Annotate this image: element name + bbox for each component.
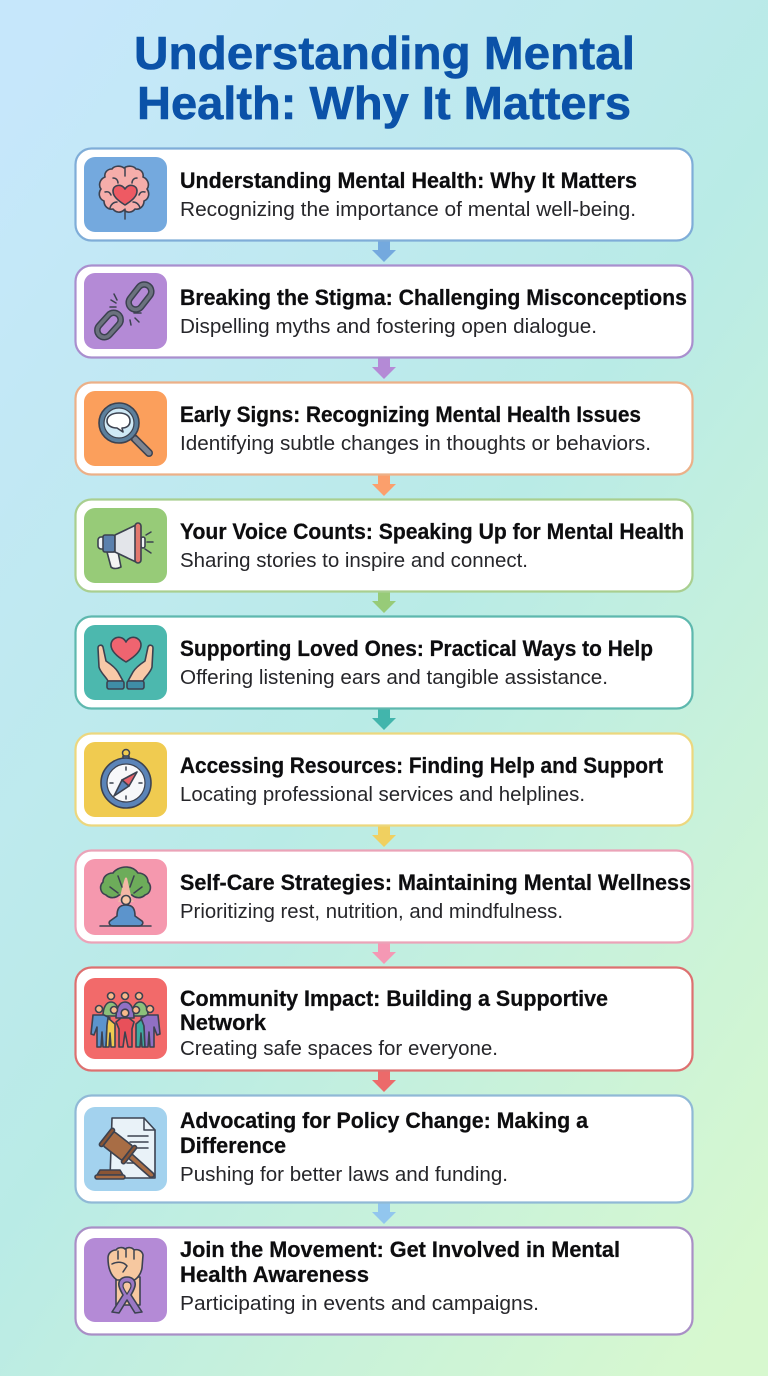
step 6 text: Locating professional services and helplines. xyxy=(180,784,585,806)
step 9 text: Pushing for better laws and funding. xyxy=(180,1164,508,1186)
step 1 text: Recognizing the importance of mental well-being. xyxy=(180,199,636,221)
icon: megaphone xyxy=(84,508,167,583)
panel: step 4 xyxy=(76,500,692,592)
step 3 text xyxy=(180,402,651,455)
step 5 text: Offering listening ears and tangible assistance. xyxy=(180,667,608,689)
step 2 text: Breaking the Stigma: Challenging Misconceptions xyxy=(180,285,687,310)
step 3 text: Early Signs: Recognizing Mental Health Issues xyxy=(180,402,641,427)
title xyxy=(134,27,635,129)
step 4 text: Sharing stories to inspire and connect. xyxy=(180,550,528,572)
arrow: step 6 to 7 xyxy=(372,825,396,847)
panel: step 2 xyxy=(76,266,692,358)
arrow: step 2 to 3 xyxy=(372,357,396,379)
icon: broken chain xyxy=(84,273,167,349)
arrow: step 4 to 5 xyxy=(372,591,396,613)
panel: step 8 xyxy=(76,968,692,1070)
step 6 text xyxy=(180,753,663,806)
panel: step 7 xyxy=(76,850,692,942)
step 5 text xyxy=(180,636,653,689)
icon: raised fist with ribbon xyxy=(84,1238,167,1322)
step 8 text: Community Impact: Building a Supportive xyxy=(180,986,608,1011)
step 10 text xyxy=(180,1237,620,1315)
step 4 text xyxy=(180,519,684,572)
arrow: step 8 to 9 xyxy=(372,1070,396,1092)
step 9 text: Advocating for Policy Change: Making a xyxy=(180,1108,588,1133)
step 4 text: Your Voice Counts: Speaking Up for Mental Health xyxy=(180,519,684,544)
icon: meditating person under tree xyxy=(84,859,167,935)
step 8 text: Creating safe spaces for everyone. xyxy=(180,1038,498,1060)
step 2 text xyxy=(180,285,687,338)
panel: step 1 xyxy=(76,148,692,240)
step 2 text: Dispelling myths and fostering open dialogue. xyxy=(180,316,597,338)
panel: step 6 xyxy=(76,734,692,826)
arrow: step 7 to 8 xyxy=(372,942,396,964)
step 6 text: Accessing Resources: Finding Help and Support xyxy=(180,753,663,778)
arrow: step 1 to 2 xyxy=(372,240,396,262)
icon: gavel and document xyxy=(84,1107,167,1191)
step 9 text: Difference xyxy=(180,1133,286,1158)
arrow: step 5 to 6 xyxy=(372,708,396,730)
panel: step 3 xyxy=(76,382,692,474)
panel: step 10 xyxy=(76,1228,692,1334)
title: Understanding Mental xyxy=(134,27,635,79)
arrow: step 3 to 4 xyxy=(372,474,396,496)
step 5 text: Supporting Loved Ones: Practical Ways to Help xyxy=(180,636,653,661)
icon: compass xyxy=(84,742,167,817)
icon: brain with heart xyxy=(84,157,167,232)
step 10 text: Participating in events and campaigns. xyxy=(180,1293,539,1315)
step 7 text: Prioritizing rest, nutrition, and mindfulness. xyxy=(180,901,563,923)
step 7 text xyxy=(180,870,691,923)
step 7 text: Self-Care Strategies: Maintaining Mental Wellness xyxy=(180,870,691,895)
step 10 text: Health Awareness xyxy=(180,1262,369,1287)
panel: step 5 xyxy=(76,616,692,708)
icon: community group xyxy=(84,978,167,1059)
icon: hands holding heart xyxy=(84,625,167,700)
step 10 text: Join the Movement: Get Involved in Mental xyxy=(180,1237,620,1262)
step 8 text xyxy=(180,986,608,1060)
step 1 text xyxy=(180,168,637,221)
step 8 text: Network xyxy=(180,1010,266,1035)
title: Health: Why It Matters xyxy=(137,77,631,129)
panel: step 9 xyxy=(76,1096,692,1202)
arrow: step 9 to 10 xyxy=(372,1202,396,1224)
step 3 text: Identifying subtle changes in thoughts or behaviors. xyxy=(180,433,651,455)
step 1 text: Understanding Mental Health: Why It Matters xyxy=(180,168,637,193)
step 9 text xyxy=(180,1108,588,1186)
icon: magnifier with speech bubble xyxy=(84,391,167,466)
